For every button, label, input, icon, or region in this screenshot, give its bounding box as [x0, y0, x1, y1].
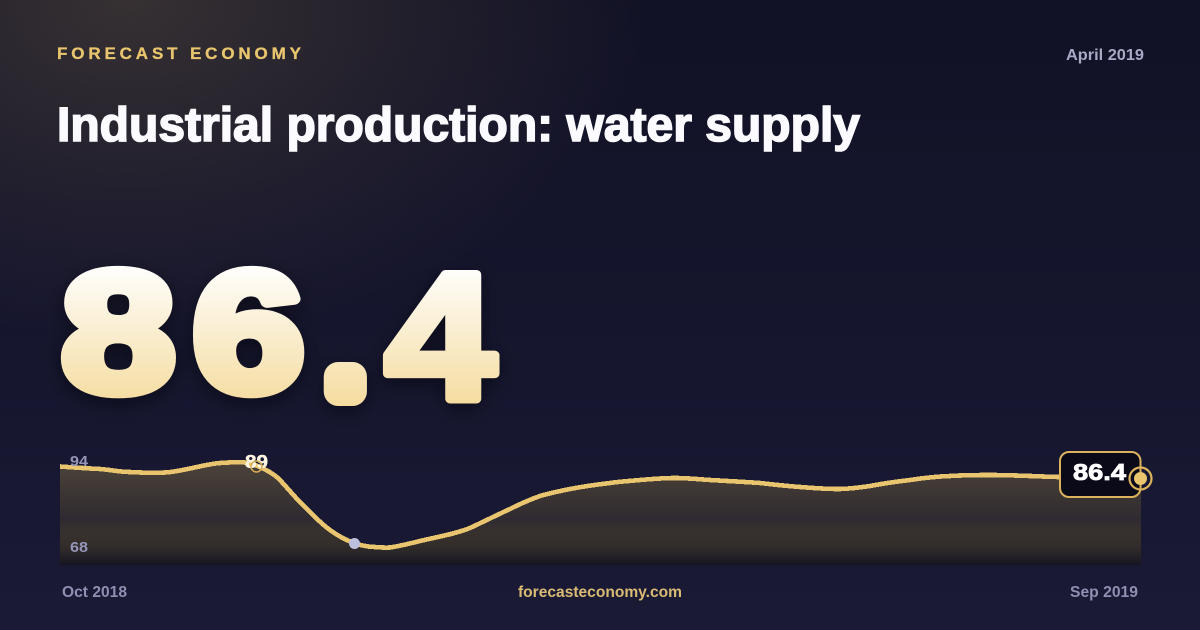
area under line	[60, 462, 1141, 565]
big value	[62, 236, 496, 438]
big value: .	[332, 302, 359, 414]
peak marker	[251, 461, 262, 472]
big value: 6	[193, 238, 304, 427]
title: Industrial production: water supply	[57, 99, 860, 152]
sparkline chart	[60, 452, 1152, 565]
current value callout: 86.4	[1073, 459, 1126, 485]
trend line	[60, 462, 1141, 548]
axis label: max: 94	[70, 453, 89, 470]
website footer: forecasteconomy.com	[518, 584, 682, 601]
big value: 4	[385, 236, 496, 438]
current value marker	[1130, 468, 1152, 490]
current value callout	[1060, 452, 1140, 497]
date label: April 2019	[1066, 47, 1144, 64]
x-axis start label: Oct 2018	[62, 584, 127, 601]
big value: 8	[62, 237, 175, 427]
trough marker	[349, 538, 360, 549]
axis label: min: 68	[70, 539, 88, 556]
x-axis end label: Sep 2019	[1070, 584, 1138, 601]
peak value label: 89	[245, 452, 268, 472]
brand eyebrow: FORECAST ECONOMY	[57, 44, 302, 63]
